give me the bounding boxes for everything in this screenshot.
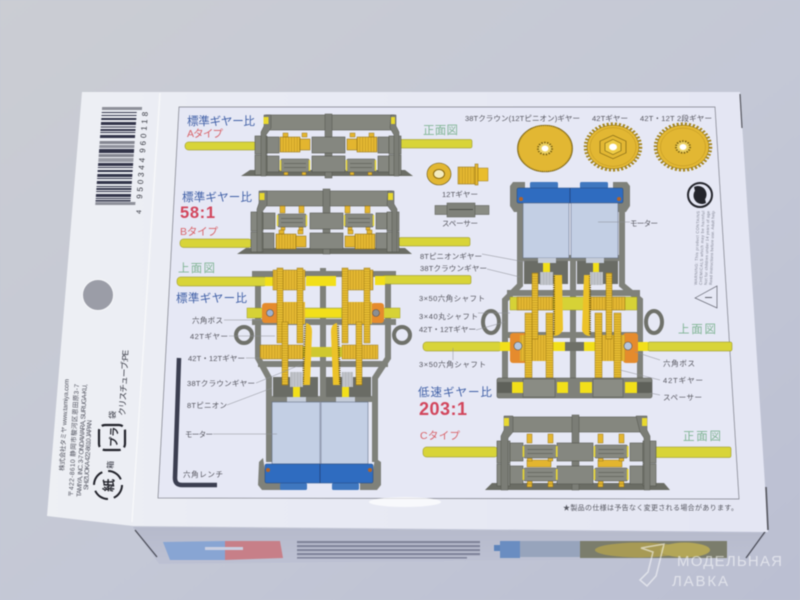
labels: left callouts: 六角レンチ	[183, 469, 223, 479]
shafts	[177, 277, 267, 286]
parts: 42T gear	[586, 124, 640, 170]
frame	[505, 212, 640, 398]
labels: parts row: 12Tギヤー	[442, 190, 478, 199]
labels: parts row: 38Tクラウン(12Tピニオン)ギヤー	[465, 114, 580, 123]
parts: 12T gear	[427, 163, 488, 185]
labels: left headings: 標準ギヤー比	[182, 190, 252, 204]
front view type A	[185, 114, 472, 178]
icon: paper recycling: 紙	[101, 478, 117, 492]
company address block: 株式会社タミヤ www.tamiya.com	[57, 379, 71, 471]
material note: bag mark: 袋	[107, 411, 117, 419]
crown gears	[554, 275, 563, 336]
labels: right callouts: 38Tクラウンギヤー	[420, 264, 487, 273]
parts: spacer	[435, 203, 489, 217]
labels: left headings: 58:1	[180, 204, 215, 222]
labels: left callouts: 8Tピニオン	[187, 401, 227, 410]
barcode	[95, 107, 142, 205]
icon: warning triangle	[695, 286, 717, 308]
barcode digits: 960118	[138, 111, 150, 153]
labels: left callouts: 42Tギヤー	[190, 332, 228, 341]
material note: クリスチューブ:PE	[117, 349, 130, 416]
labels: right headings: 正面図	[423, 124, 458, 137]
icon: recycling mark	[688, 183, 712, 207]
box back panel	[47, 92, 768, 532]
labels: left headings: 標準ギヤー比	[187, 114, 256, 128]
gold gear blocks	[273, 270, 305, 290]
warning text: Read instructions before use. Adult help	[708, 210, 716, 285]
front view type B	[180, 189, 470, 254]
watermark: ЛАВКА	[672, 573, 728, 590]
wrench	[175, 358, 217, 485]
frame	[252, 268, 396, 462]
labels: right headings	[418, 124, 721, 443]
labels: right headings: 正面図	[683, 430, 721, 443]
icon: plastic recycling: プラ	[108, 427, 121, 447]
spacer row	[497, 378, 652, 398]
labels: left headings: Aタイプ	[187, 128, 224, 140]
labels: right callouts: 六角ボス	[663, 358, 695, 368]
labels: left headings: Bタイプ	[180, 226, 218, 238]
company address block: TAMIYA, INC. 3-7 ONDAWARA, SURUGA-KU,	[76, 384, 89, 497]
crown gears	[303, 323, 312, 385]
labels: left callouts	[183, 315, 255, 479]
front view type C	[423, 415, 731, 490]
bolts	[514, 342, 522, 350]
labels: left callouts: 42T・12Tギヤー	[188, 354, 245, 363]
top view right: low gear ratio	[423, 182, 732, 398]
shafts	[423, 342, 502, 351]
gold blocks	[517, 297, 553, 310]
material note: box mark: 箱	[105, 461, 115, 469]
pinions	[540, 272, 553, 285]
mounting ears	[483, 311, 662, 333]
warning text: WARNING: This product CONTAINS	[693, 211, 701, 285]
icon: plastic recycling	[99, 425, 125, 450]
labels: left callouts: 38Tクラウンギヤー	[187, 379, 255, 388]
parts: 42T 12T two-stage gear	[656, 124, 710, 170]
icon: paper recycling	[94, 471, 122, 499]
labels: right callouts	[419, 252, 703, 402]
motors	[287, 397, 306, 402]
flap: lower box side	[133, 527, 767, 564]
warning text: Not for children under 14 years of age	[703, 210, 711, 285]
footnote: ★製品の仕様は予告なく変更される場合があります。	[563, 503, 738, 512]
labels: left callouts: 六角ボス	[192, 315, 223, 325]
labels: right headings: Cタイプ	[420, 430, 460, 442]
watermark: МОДЕЛЬНАЯ	[677, 553, 782, 570]
labels: left headings	[176, 114, 256, 305]
labels: right callouts: スペーサー	[663, 393, 702, 402]
labels: right callouts: 3×40丸シャフト	[419, 311, 478, 321]
leader lines	[213, 222, 660, 434]
labels: parts row: モーター	[630, 219, 658, 228]
labels: parts row: 42T・12T 2段ギヤー	[640, 114, 712, 123]
barcode digits	[135, 111, 150, 214]
labels: parts row	[442, 114, 712, 228]
warning text	[693, 210, 716, 285]
company address block: SHIZUOKA 422-8610 JAPAN	[83, 420, 94, 490]
parts: crown gear	[518, 125, 572, 172]
hang hole	[82, 280, 114, 310]
flap product photo	[494, 541, 727, 558]
labels: right headings: 上面図	[678, 323, 716, 336]
side-on gears	[277, 268, 283, 343]
warning text: CHEMICALS which may be harmful	[698, 211, 706, 285]
labels: left headings: 標準ギヤー比	[176, 291, 248, 305]
labels: right headings: 203:1	[419, 399, 467, 419]
labels: right callouts: 42Tギヤー	[663, 376, 703, 385]
motors	[510, 182, 525, 212]
flap text block	[297, 541, 480, 559]
barcode digits: 4	[136, 210, 143, 214]
company address block	[57, 379, 94, 497]
pinions	[290, 372, 303, 387]
labels: right callouts: 8Tピニオンギヤー	[420, 252, 482, 261]
labels: right callouts: 42T・12Tギヤー	[419, 325, 476, 334]
company address block: 〒422-8610 静岡市駿河区恩田原3-7	[66, 383, 81, 497]
mounting ears	[236, 327, 410, 343]
labels: parts row: スペーサー	[442, 219, 478, 228]
watermark	[640, 544, 782, 590]
labels: right headings: 低速ギヤー比	[418, 386, 492, 399]
bolts	[266, 310, 274, 316]
labels: left callouts: モーター	[185, 430, 213, 439]
labels: parts row: 42Tギヤー	[592, 114, 628, 123]
labels: right callouts: 3×50六角シャフト	[419, 359, 486, 369]
barcode digits: 950344	[135, 157, 147, 199]
top view left: standard gear ratio	[177, 268, 471, 490]
side-on gears	[532, 273, 538, 339]
labels: right callouts: 3×50六角シャフト	[419, 293, 485, 303]
flap logo	[163, 541, 283, 560]
panel border	[158, 107, 739, 499]
labels: left headings: 上面図	[178, 262, 215, 275]
